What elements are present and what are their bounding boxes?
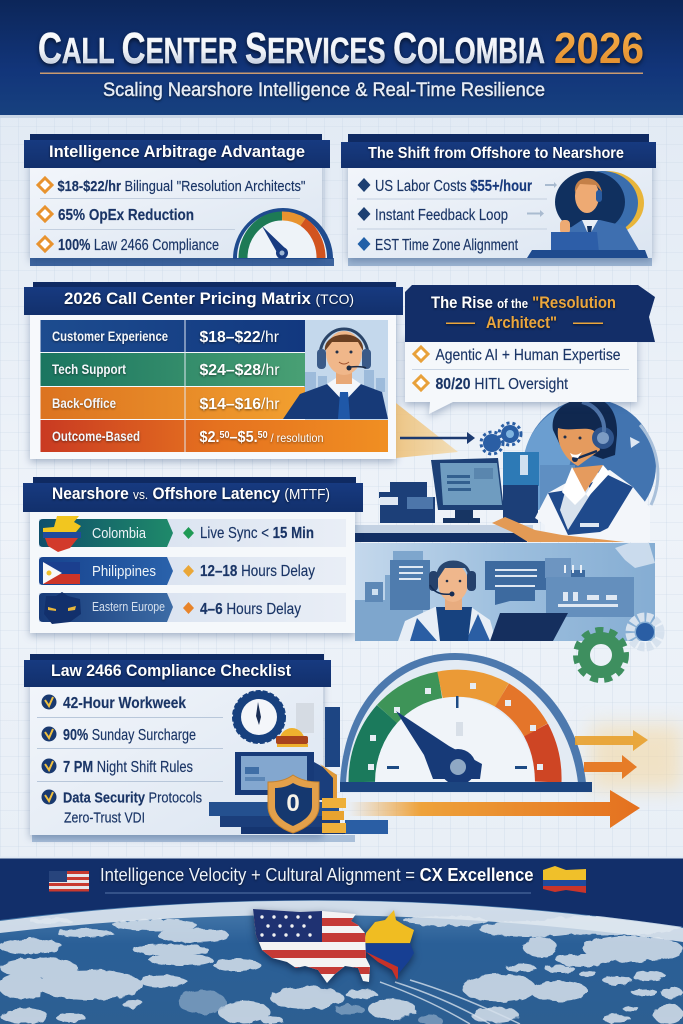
heading <box>24 140 330 168</box>
table row: outcome-based: 50 <box>220 430 230 441</box>
header band <box>0 0 683 118</box>
desk <box>355 525 533 542</box>
panel: latency comparison <box>23 477 363 633</box>
gears <box>481 423 521 454</box>
monitor <box>235 752 337 800</box>
agent illustration <box>283 329 388 419</box>
arrow: gold <box>575 730 648 751</box>
compliance illustration <box>209 691 388 834</box>
shield <box>268 775 319 833</box>
table row: tech support <box>40 353 305 386</box>
skyline <box>304 370 385 392</box>
office blocks <box>379 482 538 523</box>
bullet list: Agentic AI + Human Expertise <box>436 347 621 364</box>
table row: outcome-based: $2. <box>200 429 222 446</box>
agent torso <box>492 465 650 542</box>
clock <box>233 691 285 743</box>
subtitle: Scaling Nearshore Intelligence & Real-Time Resilience <box>103 80 545 101</box>
bullet list: 65% OpEx Reduction <box>58 207 194 224</box>
bullet list: EST Time Zone Alignment <box>375 237 519 254</box>
heading <box>341 142 656 168</box>
checklist <box>37 694 223 826</box>
scene: agent with laptop <box>355 543 655 641</box>
hard hat <box>276 728 308 747</box>
scene: resolution architect agent <box>355 398 658 542</box>
arrow: orange <box>584 755 637 779</box>
map: united states and colombia <box>250 905 420 985</box>
agent head <box>553 398 617 466</box>
panel: intelligence arbitrage advantage <box>24 134 334 266</box>
row: eastern europe <box>39 592 346 624</box>
heading: The Rise of the "Resolution <box>431 293 616 312</box>
row: colombia <box>39 516 346 552</box>
small gauge <box>233 208 333 259</box>
bullet list <box>38 178 306 254</box>
bullet list <box>412 347 629 393</box>
row: colombia: Live Sync < 15 Min <box>200 525 314 542</box>
panel: law 2466 checklist <box>24 654 355 842</box>
table row: tech support: Tech Support <box>52 361 126 377</box>
heading <box>24 287 403 315</box>
checklist: 7 PM Night Shift Rules <box>63 759 193 776</box>
agent illustration <box>527 171 648 258</box>
globe <box>503 399 658 531</box>
table row: customer experience: $18–$22/hr <box>200 329 280 346</box>
checklist: Data Security Protocols <box>63 790 202 806</box>
base <box>209 802 388 834</box>
checklist: Zero-Trust VDI <box>64 810 145 826</box>
map of united states <box>250 905 375 985</box>
tagline: Intelligence Velocity + Cultural Alignment = CX Excellence <box>100 865 534 885</box>
table row: outcome-based: –$5. <box>230 429 258 446</box>
icon: colombia flag <box>543 866 586 893</box>
bullet list: 80/20 HITL Oversight <box>436 376 568 393</box>
title: 2026 <box>554 24 644 73</box>
bullet list: US Labor Costs $55+/hour <box>375 178 532 195</box>
table row: outcome-based <box>40 420 388 452</box>
monitor <box>431 458 504 523</box>
heading <box>431 293 616 332</box>
checklist: 42-Hour Workweek <box>63 695 186 712</box>
large speedometer gauge <box>340 653 592 792</box>
row: philippines: 12–18 Hours Delay <box>200 563 315 580</box>
bullet list: Instant Feedback Loop <box>375 207 508 224</box>
earth globe <box>0 900 683 1024</box>
heading: 2026 Call Center Pricing Matrix (TCO) <box>64 289 354 308</box>
map of colombia <box>364 910 417 984</box>
laptop <box>490 613 568 641</box>
row: colombia: Colombia <box>92 525 147 542</box>
panel: pricing matrix <box>24 282 403 459</box>
table row: outcome-based: Outcome-Based <box>52 428 140 444</box>
row: philippines <box>39 557 346 585</box>
agent <box>398 560 496 641</box>
panel: resolution architect <box>405 285 655 414</box>
heading: The Shift from Offshore to Nearshore <box>368 145 624 162</box>
heading <box>24 660 331 687</box>
bullet list: 100% Law 2466 Compliance <box>58 237 219 254</box>
needle <box>396 711 482 785</box>
arrow <box>400 432 475 444</box>
table row: outcome-based: / resolution <box>268 431 324 445</box>
light beam <box>396 403 458 458</box>
row: eastern europe: 4–6 Hours Delay <box>200 601 301 618</box>
panel: shift from offshore to nearshore <box>341 134 656 266</box>
checklist: 90% Sunday Surcharge <box>63 727 196 744</box>
icon: us flag <box>49 871 89 892</box>
coins <box>322 798 346 833</box>
footer banner <box>0 856 683 933</box>
heading <box>23 483 363 512</box>
row: eastern europe: Eastern Europe <box>92 599 165 614</box>
table row: customer experience <box>40 320 305 352</box>
arrows <box>527 182 557 217</box>
table row: tech support: $24–$28/hr <box>200 362 280 379</box>
table row: back-office: Back-Office <box>52 395 116 411</box>
heading: Law 2466 Compliance Checklist <box>51 662 291 680</box>
heading: Intelligence Arbitrage Advantage <box>49 142 305 161</box>
bullet list: $18-$22/hr Bilingual "Resolution Architects" <box>58 178 306 195</box>
title: CALL CENTER SERVICES COLOMBIA <box>38 24 545 73</box>
row: philippines: Philippines <box>92 563 156 580</box>
shield: 0 <box>286 790 300 817</box>
arrow: large speed arrow <box>348 790 640 828</box>
table row: back-office <box>40 387 305 419</box>
colored arc <box>362 683 548 782</box>
table row: customer experience: Customer Experience <box>52 328 168 344</box>
table row: outcome-based: 50 <box>258 430 268 441</box>
table row: back-office: $14–$16/hr <box>200 396 280 413</box>
gears: green and grey <box>576 617 660 680</box>
bullet list <box>357 178 547 254</box>
heading: Architect" <box>486 313 557 332</box>
heading: Nearshore vs. Offshore Latency (MTTF) <box>52 484 330 503</box>
